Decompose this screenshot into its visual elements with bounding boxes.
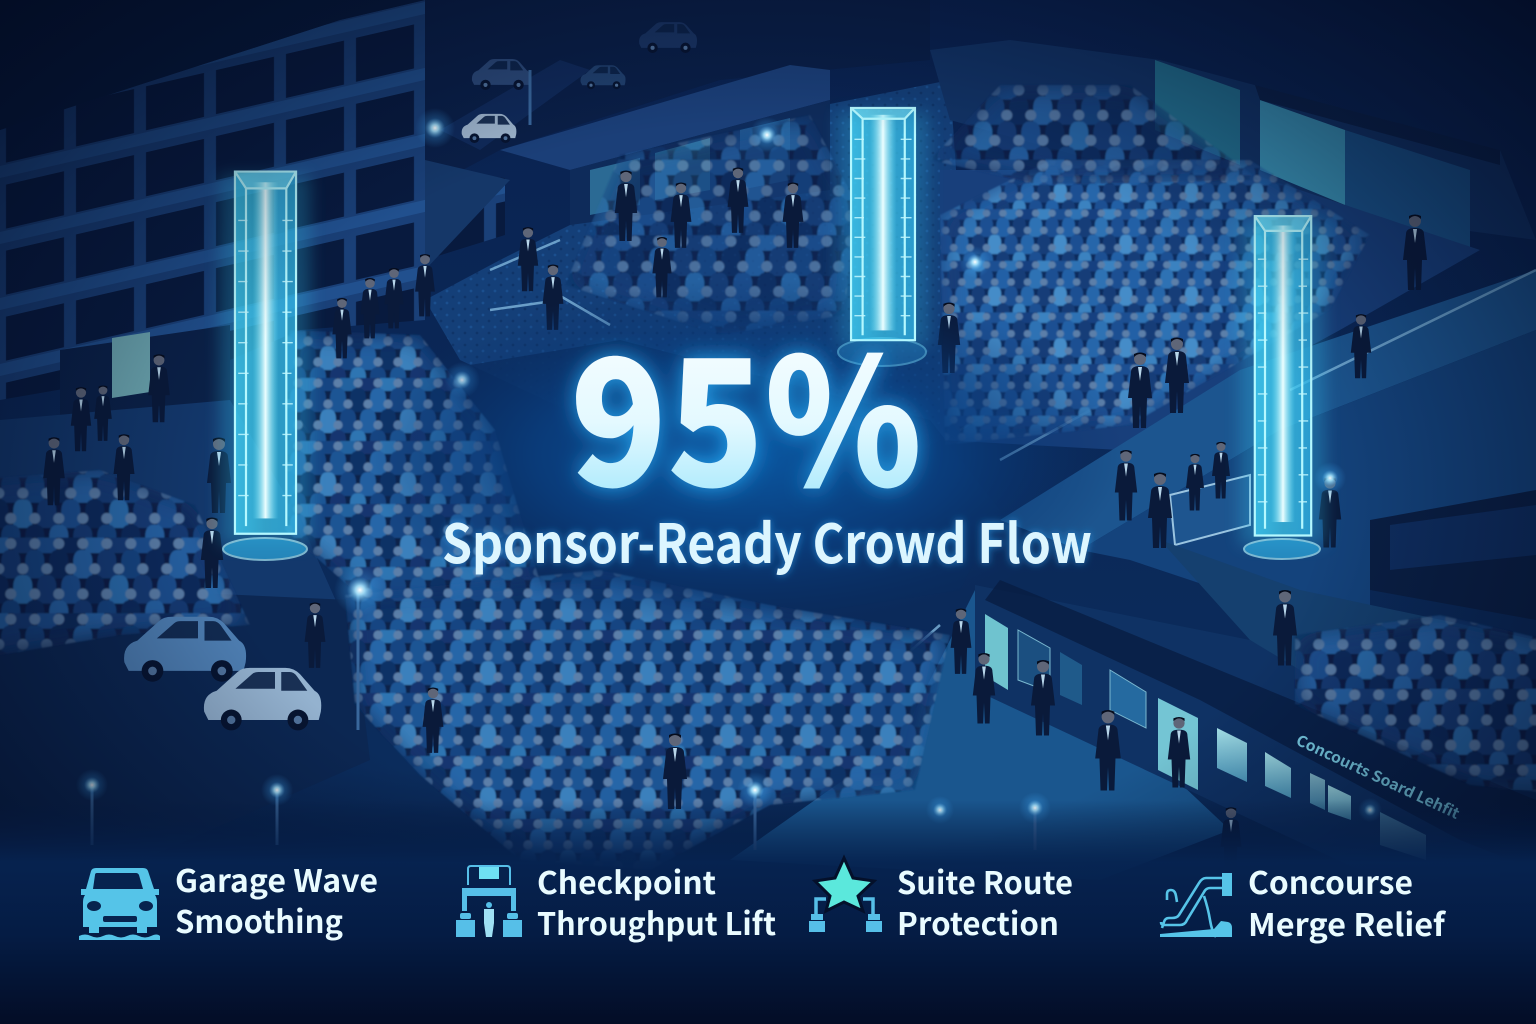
legend item: suite route protection <box>809 858 1073 944</box>
icon: car on wave <box>79 868 160 940</box>
lamp posts <box>92 70 1035 850</box>
crowd: right balcony <box>1295 615 1536 795</box>
center glow panel behind headline <box>365 280 1125 630</box>
lower-left road <box>0 590 370 870</box>
crowd: left low <box>0 470 250 660</box>
right top building <box>930 40 1536 250</box>
left plaza ground <box>0 400 340 690</box>
right raised walkway <box>1000 270 1536 640</box>
label: Merge Relief <box>1248 900 1447 945</box>
right plaza ground <box>940 170 1480 450</box>
checkpoint barrier <box>1170 475 1250 545</box>
stewards and guards <box>43 168 1427 873</box>
concourse facade <box>975 580 1536 880</box>
subtitle: Sponsor-Ready Crowd Flow <box>442 500 1092 579</box>
top center building <box>500 65 830 225</box>
legend item: garage wave smoothing <box>79 856 378 942</box>
label: Smoothing <box>175 897 343 942</box>
crowd: upper right back rows <box>930 85 1260 185</box>
crowd: left center <box>285 330 550 615</box>
glowing pillar: right <box>1240 216 1325 559</box>
icon: star with routes <box>809 858 882 932</box>
bottom right balcony <box>1160 540 1536 790</box>
glowing pillar: center <box>838 108 928 366</box>
headline stat: 95%: 95% <box>570 282 922 537</box>
parked van <box>124 617 246 682</box>
crowd: top center <box>565 115 855 335</box>
crowd: bottom center <box>345 570 950 870</box>
label: Concourse <box>1248 858 1413 903</box>
label: Checkpoint <box>537 858 716 903</box>
top parking lot <box>425 0 930 190</box>
railing segments <box>300 240 1536 770</box>
lamp lights <box>76 108 1382 824</box>
label: Throughput Lift <box>537 899 776 944</box>
legend item: concourse merge relief <box>1160 858 1447 945</box>
left lobby entrance <box>60 325 230 440</box>
icon: escalator <box>1160 873 1232 937</box>
bottom legend fade <box>0 800 1536 1024</box>
legend row <box>79 856 1447 945</box>
bottom right forecourt <box>730 590 1230 880</box>
building sign text: Concourts Soard Lehfit <box>1293 729 1464 824</box>
label: Garage Wave <box>175 856 378 901</box>
left tower <box>0 0 510 400</box>
legend item: checkpoint throughput lift <box>456 858 776 944</box>
crowd: upper right <box>940 160 1370 445</box>
center dark walkway <box>440 340 1000 620</box>
top center plaza <box>425 80 960 520</box>
label: Protection <box>897 899 1059 944</box>
label: Suite Route <box>897 858 1073 903</box>
glowing pillar: left <box>220 172 310 560</box>
parked sedan <box>204 668 321 730</box>
icon: checkpoint gate <box>456 865 522 937</box>
